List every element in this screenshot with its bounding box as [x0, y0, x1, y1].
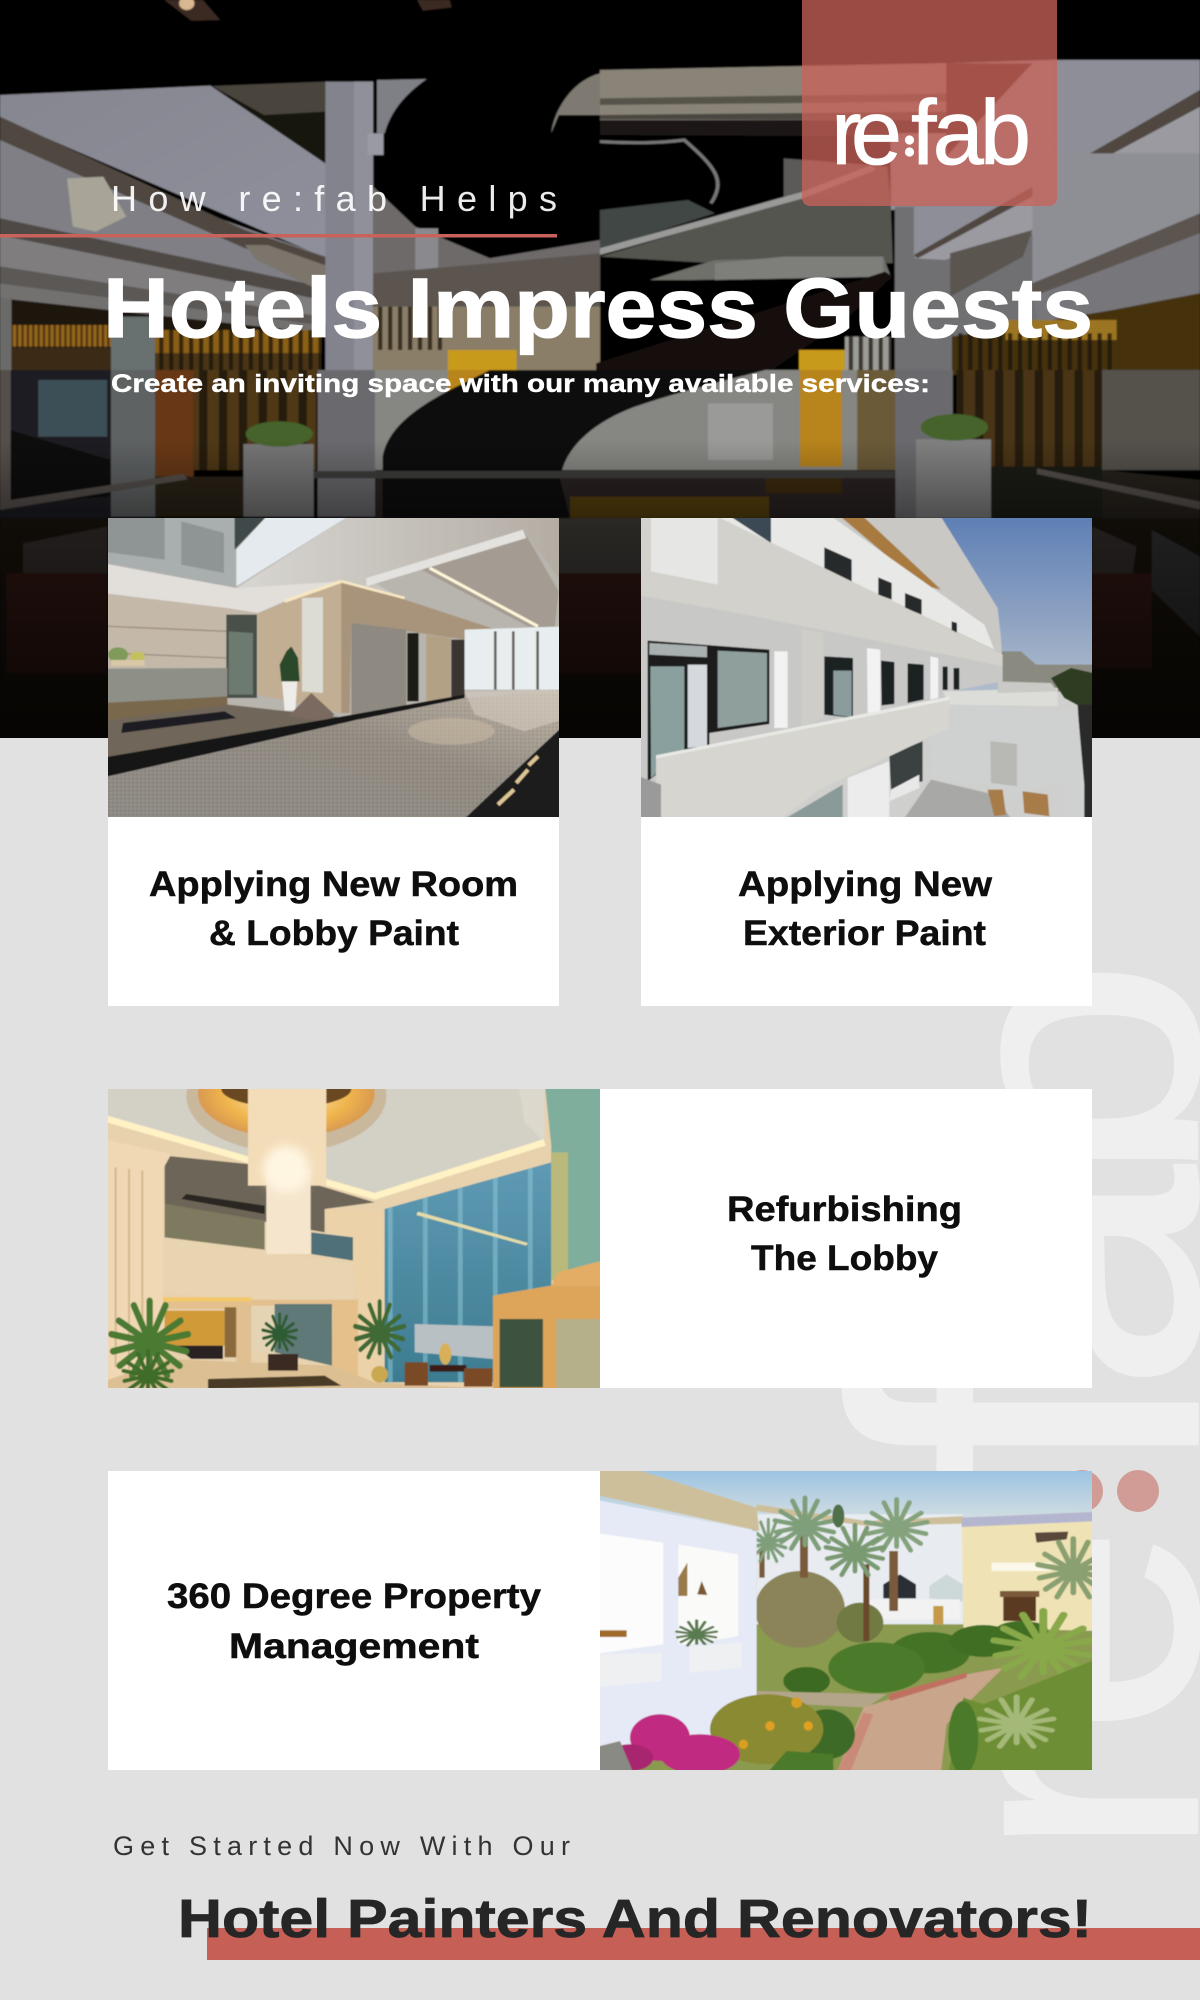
caption card	[641, 817, 1092, 1006]
watermark colon dots	[1061, 1470, 1159, 1512]
caption heading	[727, 1190, 962, 1278]
caption heading: & Lobby Paint	[209, 914, 459, 953]
photo: white hotel exterior with balconies	[641, 518, 1092, 817]
caption heading	[149, 865, 518, 953]
caption card	[600, 1089, 1092, 1388]
panel: refurbishing the lobby	[108, 1089, 1092, 1388]
photo: grand lobby with chandelier and blue glass wall	[108, 1089, 600, 1388]
subtitle: Create an inviting space with our many available services:	[111, 370, 930, 398]
panel: room and lobby paint	[98, 508, 571, 1006]
caption heading: The Lobby	[751, 1239, 939, 1278]
caption heading: Refurbishing	[727, 1190, 962, 1229]
eyebrow underline	[0, 234, 557, 238]
red accent bar	[207, 1928, 1200, 1960]
caption heading: Exterior Paint	[743, 914, 986, 953]
caption heading	[738, 865, 993, 953]
caption card	[108, 1471, 600, 1770]
logo block: re	[831, 82, 902, 184]
caption card	[108, 817, 559, 1006]
caption heading	[167, 1577, 542, 1666]
main title: Hotels Impress Guests	[103, 261, 1093, 355]
photo: hotel lobby with reception and elevators	[108, 518, 559, 817]
logo block	[802, 0, 1057, 206]
caption heading: Management	[229, 1627, 479, 1666]
watermark: rotated re:fab logotype	[756, 958, 1200, 1857]
caption heading: Applying New Room	[149, 865, 518, 904]
hero background photo: hotel atrium with spiral staircase	[0, 0, 1200, 760]
eyebrow heading: How re:fab Helps	[111, 178, 557, 219]
logo block: fab	[911, 82, 1031, 184]
closing headline: Hotel Painters And Renovators!	[178, 1889, 1092, 1949]
closing intro line: Get Started Now With Our	[113, 1831, 570, 1861]
panel: property management	[108, 1461, 1109, 1781]
photo: resort garden with palms and path	[600, 1471, 1092, 1770]
caption heading: Applying New	[738, 865, 993, 904]
panel: exterior paint	[631, 508, 1104, 1006]
caption heading: 360 Degree Property	[167, 1577, 542, 1616]
